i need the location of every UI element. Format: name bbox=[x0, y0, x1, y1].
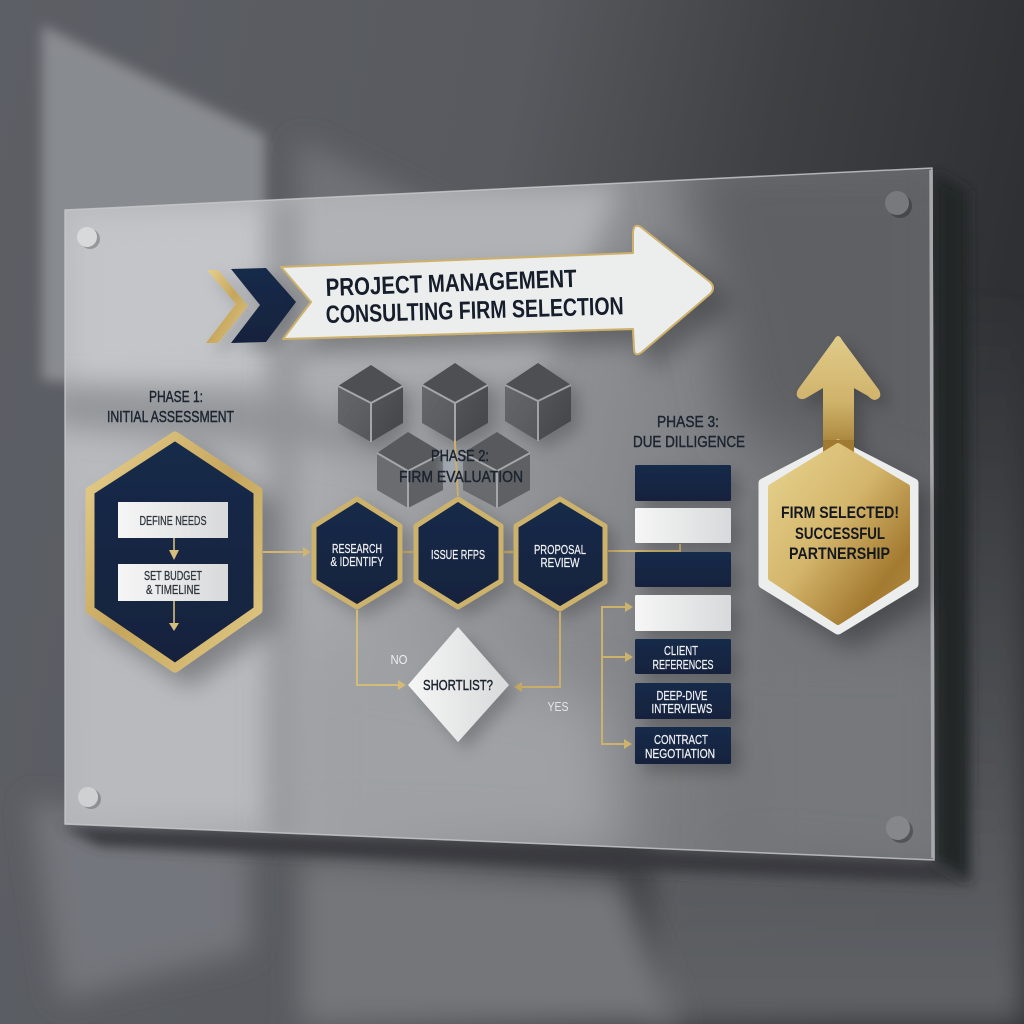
set budget box: & TIMELINE bbox=[146, 582, 200, 597]
phase 1 hexagon bbox=[90, 436, 258, 668]
standoff screw bottom right bbox=[886, 816, 913, 843]
contract negotiation bbox=[635, 727, 731, 764]
phase 3 stack bbox=[635, 465, 731, 764]
deep-dive interviews: INTERVIEWS bbox=[652, 701, 713, 716]
phase 2 heading: FIRM EVALUATION bbox=[399, 469, 523, 486]
yes branch arrow bbox=[514, 612, 560, 692]
phase 2 heading bbox=[399, 448, 523, 486]
shortlist diamond bbox=[408, 627, 509, 742]
hexagon issue RFPs: ISSUE RFPS bbox=[431, 547, 485, 562]
standoff screw bottom left bbox=[78, 787, 101, 809]
standoff screw top right bbox=[885, 191, 912, 218]
branching arrows to phase 3 items bbox=[602, 602, 633, 749]
hexagon research and identify: RESEARCH bbox=[332, 541, 382, 556]
no branch arrow bbox=[357, 610, 406, 690]
white bar 2 bbox=[635, 595, 731, 631]
standoff screw top left bbox=[77, 227, 100, 249]
cube cluster bbox=[338, 363, 571, 508]
final hexagon: FIRM SELECTED! bbox=[781, 503, 899, 522]
phase 3 heading bbox=[633, 414, 745, 451]
title banner arrow bbox=[206, 226, 713, 354]
title text: PROJECT MANAGEMENT bbox=[325, 265, 577, 302]
navy bar 2 bbox=[635, 552, 731, 587]
gold chevron bbox=[206, 270, 248, 343]
hexagon issue RFPs bbox=[416, 499, 501, 607]
arrow phase 1 to research bbox=[263, 547, 311, 557]
connector proposal to phase 3 bbox=[608, 544, 680, 551]
hexagon research and identify: & IDENTIFY bbox=[330, 554, 384, 569]
set budget box: SET BUDGET bbox=[144, 568, 202, 583]
white bar 1 bbox=[635, 508, 731, 543]
banner arrow body bbox=[281, 226, 713, 354]
client references bbox=[635, 639, 731, 674]
yes label: YES bbox=[548, 699, 569, 714]
connector research to RFPs bbox=[403, 551, 413, 553]
cube 1 bbox=[338, 365, 403, 442]
phase 1 heading: PHASE 1: bbox=[149, 389, 203, 406]
navy bar 1 bbox=[635, 465, 731, 501]
title text bbox=[325, 265, 624, 329]
connector from cubes to Issue RFPs bbox=[444, 440, 458, 496]
contract negotiation: NEGOTIATION bbox=[645, 746, 715, 761]
phase 1 heading bbox=[107, 389, 234, 426]
cube 4 bbox=[377, 432, 443, 508]
deep-dive interviews bbox=[635, 683, 731, 719]
define needs box bbox=[118, 502, 228, 538]
client references: REFERENCES bbox=[652, 657, 714, 672]
result arrow bbox=[797, 336, 880, 455]
navy chevron bbox=[231, 268, 296, 343]
cube 3 bbox=[505, 363, 571, 441]
hexagon proposal review bbox=[516, 499, 605, 609]
phase 1 heading: INITIAL ASSESSMENT bbox=[107, 409, 234, 426]
glass panel bbox=[50, 150, 960, 880]
final hexagon: SUCCESSFUL bbox=[795, 524, 885, 543]
arrow below budget bbox=[169, 601, 179, 631]
contract negotiation: CONTRACT bbox=[654, 732, 708, 747]
phase 3 heading: DUE DILLIGENCE bbox=[633, 434, 745, 451]
no label: NO bbox=[390, 652, 408, 667]
set budget box bbox=[118, 564, 228, 601]
hexagon proposal review: PROPOSAL bbox=[534, 542, 586, 557]
phase 3 heading: PHASE 3: bbox=[657, 414, 719, 431]
hexagon proposal review: REVIEW bbox=[540, 555, 580, 570]
hexagon research and identify bbox=[314, 499, 400, 607]
final hexagon bbox=[763, 440, 914, 630]
phase 2 heading: PHASE 2: bbox=[431, 448, 489, 465]
title text: CONSULTING FIRM SELECTION bbox=[325, 292, 624, 329]
client references: CLIENT bbox=[664, 643, 698, 658]
define needs box: DEFINE NEEDS bbox=[140, 513, 207, 528]
deep-dive interviews: DEEP-DIVE bbox=[656, 688, 708, 703]
shortlist diamond: SHORTLIST? bbox=[423, 677, 493, 694]
arrow to budget bbox=[169, 538, 179, 560]
cube 2 bbox=[422, 363, 488, 442]
cube 5 bbox=[463, 432, 530, 508]
final hexagon: PARTNERSHIP bbox=[789, 544, 890, 563]
connector RFPs to proposal bbox=[504, 551, 513, 553]
